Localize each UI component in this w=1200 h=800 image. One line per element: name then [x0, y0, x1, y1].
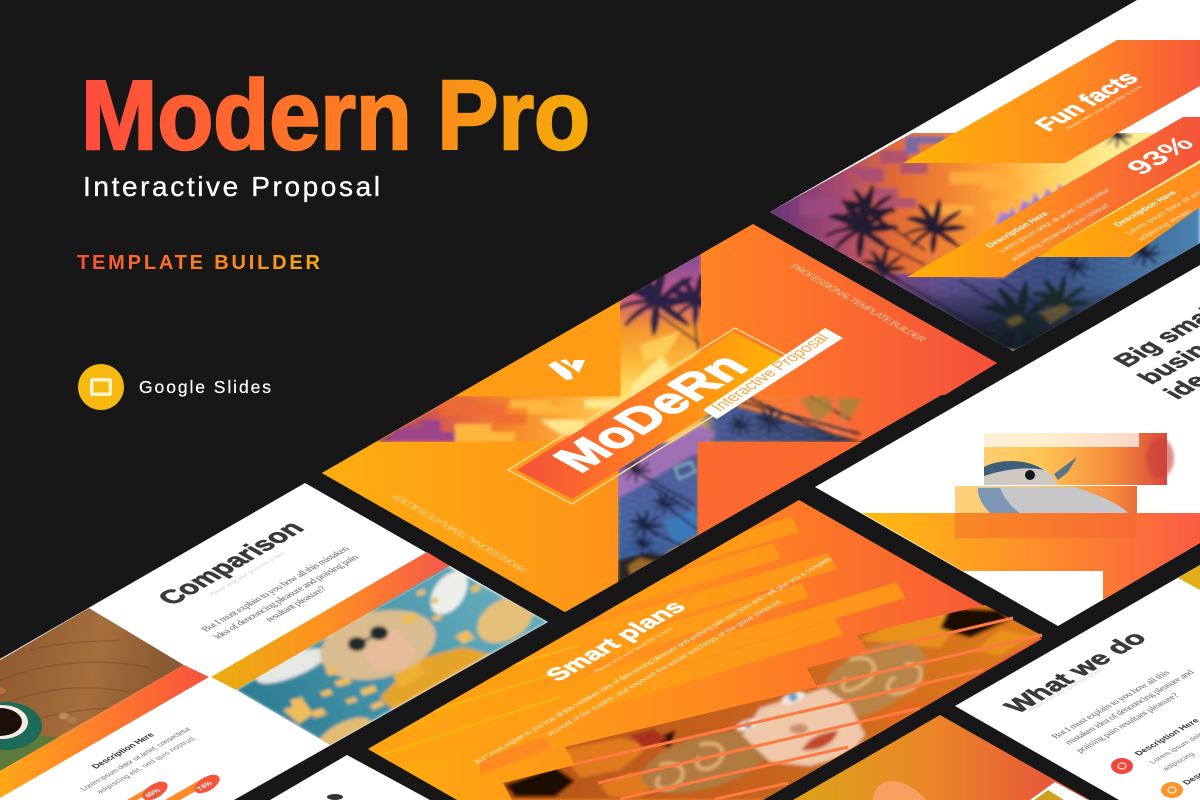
heading: comparison: Comparison — [151, 517, 310, 609]
photo: woman in sunglasses — [236, 565, 548, 755]
paragraph: idea of denouncing pleasure and praising pain — [211, 554, 362, 640]
band: 93 percent — [907, 117, 1200, 277]
description one: Description Here — [983, 210, 1051, 249]
icon: shoe — [873, 781, 926, 800]
paragraph: mistaken idea of denouncing pleasure and — [1062, 668, 1197, 746]
template builder heading: TEMPLATE BUILDER — [77, 252, 321, 274]
description one: adipiscing veniamsed quis nostrud — [1008, 203, 1111, 262]
pill: 74 percent: 74% — [194, 780, 215, 792]
logo box — [517, 332, 792, 499]
paragraph: But I must explain to you how all this mistaken — [199, 545, 352, 633]
pill: 74 percent — [165, 771, 223, 800]
heading: smart plans: Smart plans — [540, 597, 692, 685]
description two: Description Here — [1111, 189, 1179, 228]
subtitle: Interactive Proposal — [83, 171, 380, 202]
panel overlay: orange triangle top left — [455, 301, 620, 396]
white corner — [1030, 782, 1088, 800]
icon: coffee cup — [0, 702, 42, 750]
panel overlay: orange triangle bottom right — [698, 442, 862, 535]
subheading: Please write your great title is here — [1065, 85, 1144, 131]
icon: red circle — [1111, 758, 1133, 774]
bird image — [955, 433, 1174, 513]
panel: small white slide bottom — [270, 755, 430, 800]
panel image: sunset palms — [376, 252, 862, 585]
pill: 45 percent: 45% — [142, 787, 163, 799]
bars — [370, 517, 905, 777]
paragraph: resultant pleasure? — [263, 585, 330, 623]
description two: adipiscing veniam — [1135, 208, 1194, 242]
band: second description — [1037, 163, 1200, 257]
wood photo — [0, 608, 184, 771]
pill: 45 percent — [127, 778, 171, 800]
description one: Lorem ipsum dolor sit amet, consectetur — [996, 187, 1112, 254]
panel: big small business ideas slide — [815, 265, 1200, 626]
paragraph: But I must explain to you how all this mistaken idea of denouncing pleasure and praising pain was born and I will give you a complete — [472, 556, 835, 765]
label: professional template builder right: PROFESSIONAL TEMPLATE BUILDER — [787, 263, 929, 344]
description one: Description Here — [1132, 717, 1200, 757]
description text: adipiscing elit, sed quis nostrud — [94, 736, 197, 795]
paragraph: praising pain resultant pleasure? — [1073, 692, 1182, 754]
faded bird reflection — [955, 513, 1137, 538]
panel: what we do slide — [955, 565, 1200, 800]
heading: big small business ideas — [1108, 300, 1200, 403]
panel overlay: orange shape bottom left — [322, 442, 618, 612]
panel: comparison slide — [0, 483, 548, 800]
bar accent lines — [378, 644, 580, 756]
icon: Google Slides — [78, 364, 124, 410]
heading: fun facts: Fun facts — [1029, 68, 1145, 135]
portrait stripes — [575, 618, 1042, 799]
panel overlay: orange shape top right — [701, 224, 997, 395]
panel: shoes slide — [793, 715, 1090, 800]
panel: smart plans slide — [368, 500, 1060, 800]
label: professional template builder left: PROFESSIONAL TEMPLATE BUILDER — [390, 492, 531, 573]
logo outline — [508, 328, 799, 504]
title: Modern Pro — [81, 60, 590, 170]
heading: what we do: What we do — [997, 627, 1153, 717]
description text: Lorem ipsum dolor sit amet, consectetur — [78, 725, 193, 792]
sunset image — [765, 123, 1200, 352]
orange band — [862, 513, 1200, 600]
subheading: Please write your great title is here — [209, 552, 287, 597]
band: right gradient — [211, 552, 450, 690]
band: left gradient — [0, 665, 209, 798]
dark text bar — [480, 737, 552, 775]
description one: adipiscing — [1160, 751, 1197, 772]
paragraph: account of the system, and expound the actual teachings of the great pleasure — [544, 599, 784, 737]
paragraph: But I must explain to you how all this — [1049, 669, 1173, 740]
panel: main cover slide — [322, 224, 997, 612]
description text: Description Here — [89, 731, 157, 770]
band: fun facts — [903, 40, 1200, 163]
cover title MoDeRn: MoDeRn — [543, 347, 760, 479]
panel: fun facts slide — [765, 0, 1200, 352]
subheading: Please write your great title is here — [594, 627, 675, 674]
Google Slides label: Google Slides — [139, 377, 271, 397]
number: 93%: 93% — [1119, 132, 1200, 179]
woman portrait — [500, 600, 1060, 800]
yellow photo corner — [1178, 565, 1200, 590]
subheading: Please write your great title is here — [1027, 668, 1105, 713]
icon: M logo — [548, 359, 585, 380]
tag: interactive proposal: Interactive Proposal — [707, 331, 833, 414]
icon: orange circle — [1161, 782, 1183, 798]
